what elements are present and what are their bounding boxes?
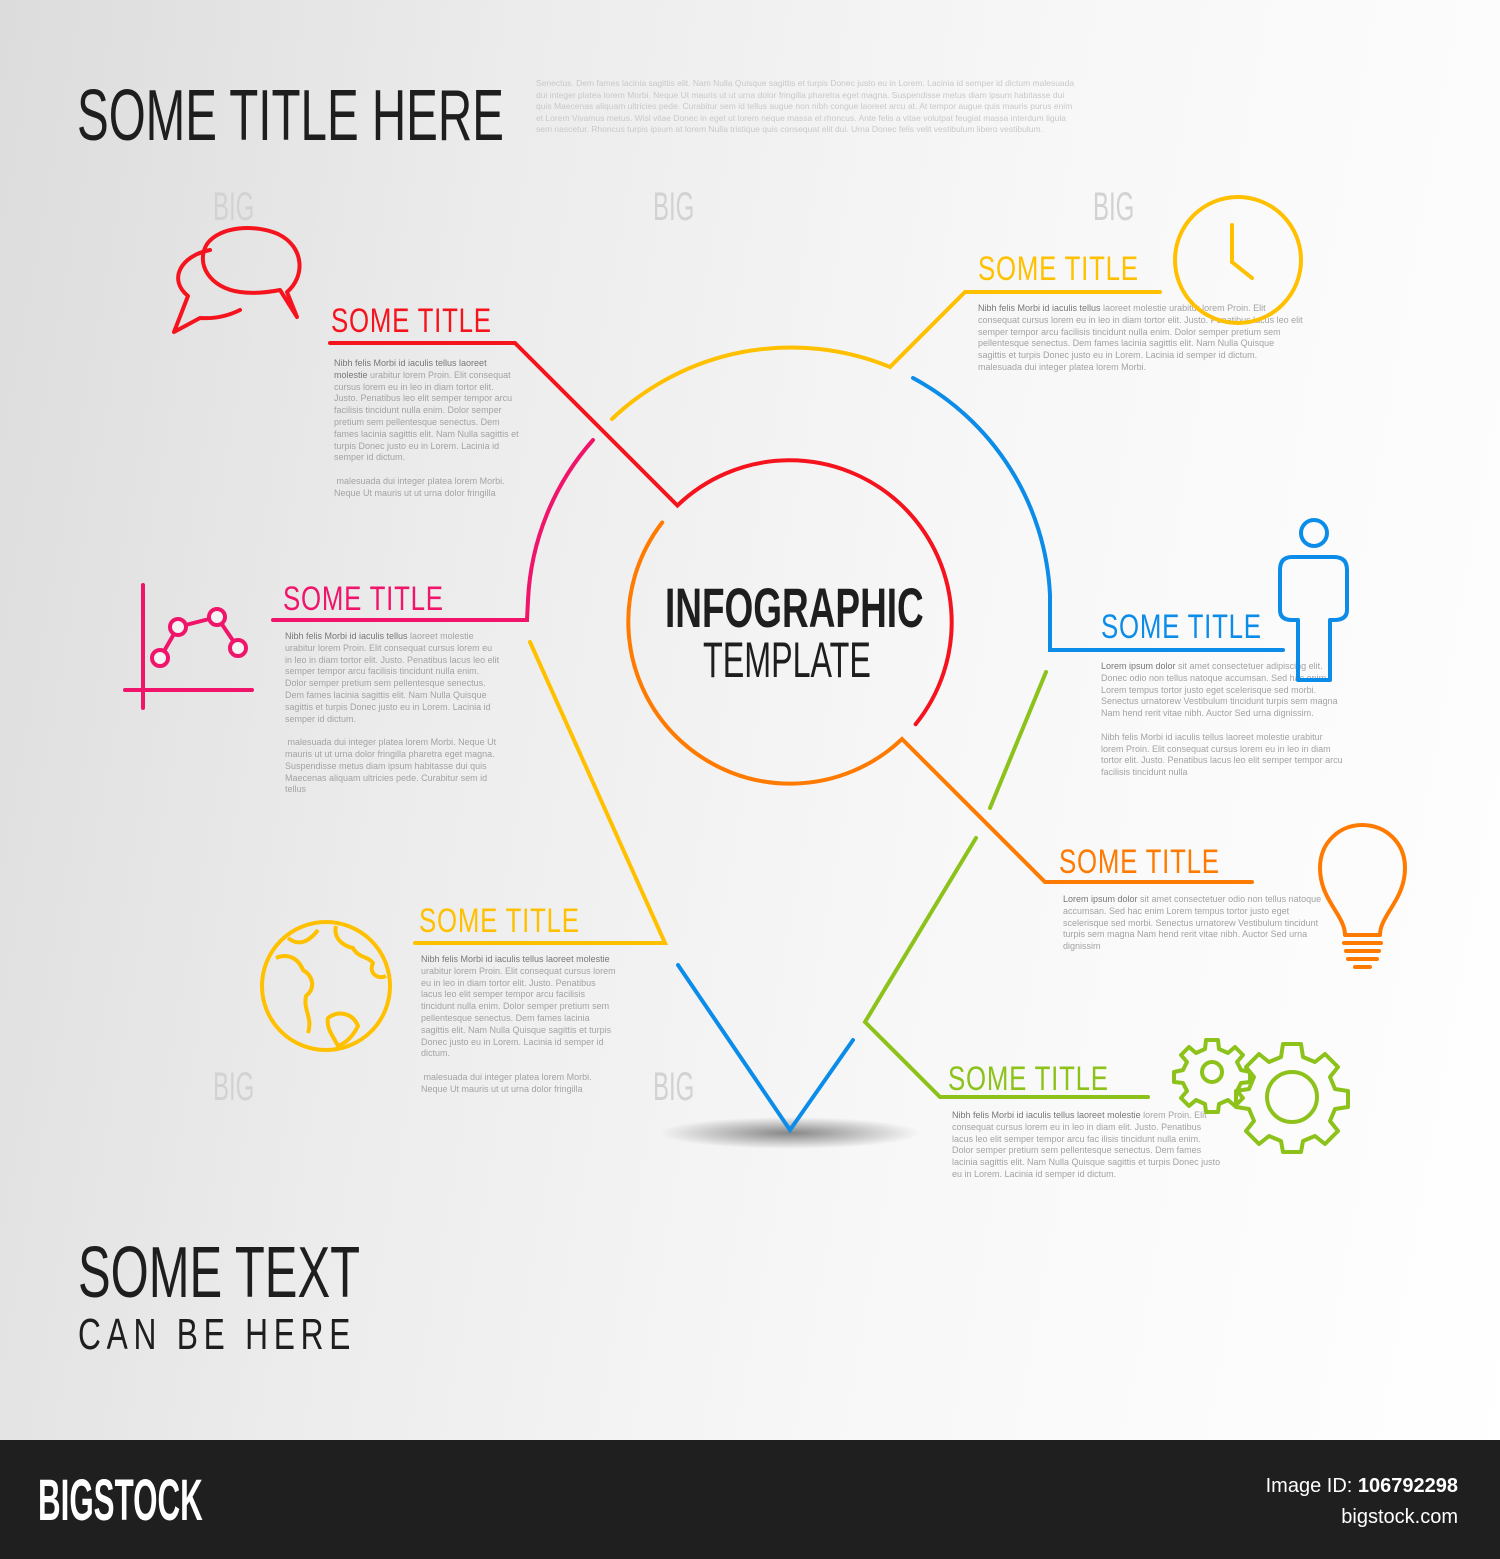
panel: yellow top-right bbox=[978, 250, 1303, 372]
bottom bar: Image ID: 106792298 bbox=[1266, 1475, 1458, 1497]
panel: red: malesuada dui integer platea lorem Morbi. Neque Ut mauris ut ut urna dolor fringilla bbox=[334, 476, 505, 498]
pin shadow bbox=[660, 1117, 920, 1149]
outer yellow top arc + connector bbox=[612, 292, 1160, 419]
outer blue arc + connector bbox=[913, 378, 1283, 650]
watermark labels: BIG bbox=[1093, 185, 1134, 229]
panel: orange bbox=[1059, 843, 1321, 951]
left yellow line + connector bbox=[415, 642, 665, 943]
inner red arc + connector bbox=[330, 343, 952, 724]
footer text: CAN BE HERE bbox=[78, 1310, 356, 1359]
panel: yellow left: malesuada dui integer platea lorem Morbi. Neque Ut mauris ut ut urna dolor fringilla bbox=[421, 1072, 592, 1094]
panel: green: SOME TITLE bbox=[948, 1060, 1109, 1098]
icon: gears bbox=[1172, 1038, 1350, 1154]
panel: red bbox=[331, 302, 519, 498]
center label bbox=[665, 576, 924, 688]
panel: green bbox=[948, 1060, 1220, 1179]
icon: globe bbox=[260, 920, 392, 1052]
panel: orange: Lorem ipsum dolor sit amet consectetuer odio non tellus natoque accumsan. Sed hac enim Lorem tempus tortor justo eget scelerisque sed morbi. Senectus urnatorew Vestibulum tincidunt turpis sem magna Nam hend rerit vitae nibh. Auctor Sed urna dignissim bbox=[1063, 894, 1321, 951]
icon: person bbox=[1278, 518, 1349, 682]
center label: TEMPLATE bbox=[703, 632, 871, 688]
panel: red: Nibh felis Morbi id iaculis tellus laoreet molestie urabitur lorem Proin. Elit consequat cursus lorem eu in leo in diam tortor elit. Justo. Penatibus leo elit semper tempor arcu facilisis tincidunt nulla enim. Dolor semper pretium sem pellentesque senectus. Dem fames lacinia sagittis elit. Nam Nulla sagittis et turpis Donec justo eu in Lorem. Lacinia id semper id dictum. bbox=[334, 358, 519, 462]
watermark labels: BIG bbox=[653, 185, 694, 229]
inner orange arc + connector bbox=[628, 522, 1252, 882]
bottom bar: bigstock.com bbox=[1341, 1506, 1458, 1528]
panel: green: Nibh felis Morbi id iaculis tellus laoreet molestie lorem Proin. Elit consequat cursus lorem eu in leo in diam elit. Justo. Penatibus lacus leo elit semper tempor arcu fac ilisis tincidunt nulla enim. Dolor semper pretium sem pellentesque senectus. Dem fames lacinia sagittis elit. Nam Nulla Quisque sagittis et turpis Donec justo eu in Lorem. Lacinia id semper id dictum. bbox=[952, 1110, 1220, 1179]
bottom bar: BIGSTOCK bbox=[38, 1468, 203, 1533]
icon: light bulb bbox=[1318, 823, 1407, 969]
panel: blue: Nibh felis Morbi id iaculis tellus laoreet molestie urabitur lorem Proin. Elit consequat cursus lorem eu in leo in diam tortor elit. Justo. Penatibus lacus leo elit semper tempor arcu facilisis tincidunt nulla bbox=[1101, 732, 1343, 777]
intro text: Senectus. Dem fames lacinia sagittis elit. Nam Nulla Quisque sagittis et turpis Donec justo eu in Lorem. Lacinia id semper id dictum malesuada dui integer platea lorem Morbi. Neque Ut mauris ut ut urna dolor fringilla pharetra eget magna. Suspendisse metus diam ipsum habitasse dui quis Maecenas aliquam ultricies pede. Curabitur sem id tellus augue non nibh congue laoreet arcu at. At tempor augue quis mauris purus enim et Lorem Vivamus metus. Wisl vitae Donec in eget ut lorem neque massa et rhoncus. Ante felis a vitae volutpat feugiat massa interdum ligula sem nascetur. Rhoncus turpis ipsum at lorem Nulla tristique quis consequat elit dui. Urna Donec felis velit vestibulum libero vestibulum. bbox=[536, 78, 1074, 134]
bottom bar bbox=[0, 1440, 1500, 1559]
watermark labels: BIG bbox=[653, 1065, 694, 1109]
panel: pink bbox=[283, 580, 500, 794]
panel: pink: Nibh felis Morbi id iaculis tellus laoreet molestie urabitur lorem Proin. Elit consequat cursus lorem eu in leo in diam tortor elit. Justo. Penatibus lacus leo elit semper tempor arcu facilisis tincidunt nulla enim. Dolor semper pretium sem pellentesque senectus. Dem fames lacinia sagittis elit. Nam Nulla Quisque sagittis et turpis Donec justo eu in Lorem. Lacinia id semper id dictum. bbox=[285, 631, 499, 724]
footer text: SOME TEXT bbox=[78, 1233, 360, 1313]
panel: pink: SOME TITLE bbox=[283, 580, 444, 618]
panel: yellow left: SOME TITLE bbox=[419, 902, 580, 940]
panel: pink: malesuada dui integer platea lorem Morbi. Neque Ut mauris ut ut urna dolor fringilla pharetra eget magna. Suspendisse metus diam ipsum habitasse dui quis Maecenas aliquam ultricies pede. Curabitur sem id tellus bbox=[285, 737, 496, 794]
panel: yellow left: Nibh felis Morbi id iaculis tellus laoreet molestie urabitur lorem Proin. Elit consequat cursus lorem eu in leo in diam tortor elit. Justo. Penatibus lacus leo elit semper tempor arcu facilisis tincidunt nulla enim. Dolor semper pretium sem pellentesque senectus. Dem fames lacinia sagittis elit. Nam Nulla Quisque sagittis et turpis Donec justo eu in Lorem. Lacinia id semper id dictum. bbox=[421, 954, 616, 1058]
footer text bbox=[78, 1233, 360, 1359]
panel: blue: Lorem ipsum dolor sit amet consectetuer adipiscing elit. Donec odio non tellus natoque accumsan. Sed hac enim Lorem tempus tortor justo eget scelerisque sed morbi. Senectus urnatorew Vestibulum tincidunt turpis sem magna Nam hend rerit vitae nibh. Auctor Sed urna dignissim. bbox=[1101, 661, 1338, 718]
icon: clock bbox=[1173, 195, 1303, 325]
watermark labels: BIG bbox=[213, 185, 254, 229]
title: SOME TITLE HERE bbox=[77, 76, 504, 156]
panel: yellow top-right: Nibh felis Morbi id iaculis tellus laoreet molestie urabitur lorem Proin. Elit consequat cursus lorem eu in leo in diam tortor elit. Justo. Penatibus lacus leo elit semper tempor arcu facilisis tincidunt nulla enim. Dolor semper pretium sem pellentesque senectus. Dem fames lacinia sagittis elit. Nam Nulla Quisque sagittis et turpis Donec justo eu in Lorem. Lacinia id semper id dictum. malesuada dui integer platea lorem Morbi. bbox=[978, 303, 1303, 372]
panel: yellow top-right: SOME TITLE bbox=[978, 250, 1139, 288]
watermark labels: BIG bbox=[213, 1065, 254, 1109]
icon: speech bubbles bbox=[172, 226, 302, 334]
panel: yellow left bbox=[419, 902, 616, 1094]
panel: orange: SOME TITLE bbox=[1059, 843, 1220, 881]
green lines + connector bbox=[990, 672, 1046, 808]
center label: INFOGRAPHIC bbox=[665, 576, 924, 639]
blue V bbox=[678, 965, 853, 1130]
panel: blue: SOME TITLE bbox=[1101, 608, 1262, 646]
outer pink arc + connector bbox=[273, 440, 593, 620]
panel: blue bbox=[1101, 608, 1343, 777]
panel: red: SOME TITLE bbox=[331, 302, 492, 340]
icon: chart bbox=[123, 583, 254, 710]
